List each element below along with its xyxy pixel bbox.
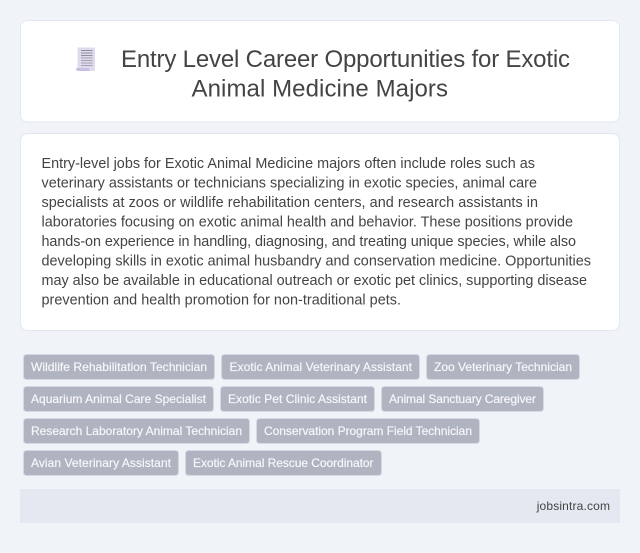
tag: Exotic Animal Veterinary Assistant [222, 354, 420, 380]
tag: Exotic Animal Veterinary Assistant: Exotic Animal Veterinary Assistant [230, 360, 413, 374]
text block: description: prevention and health promotion for non-traditional pets. [42, 292, 401, 308]
tag: Zoo Veterinary Technician [426, 354, 580, 380]
tag: Conservation Program Field Technician: Conservation Program Field Technician [264, 424, 472, 438]
tag: Exotic Pet Clinic Assistant: Exotic Pet Clinic Assistant [228, 392, 368, 406]
text block: description: specialists at zoos or wildlife rehabilitation centers, and research assistants in [42, 195, 538, 211]
tag: Aquarium Animal Care Specialist [24, 386, 214, 412]
title [121, 46, 570, 102]
tag list [24, 354, 580, 476]
tag: Conservation Program Field Technician [256, 418, 480, 444]
tag: Wildlife Rehabilitation Technician: Wildlife Rehabilitation Technician [31, 360, 207, 374]
tag: Research Laboratory Animal Technician: Research Laboratory Animal Technician [31, 424, 242, 438]
footer source text: jobsintra.com [536, 499, 610, 513]
text block: description: hands-on experience in handling, diagnosing, and treating unique species, while also [42, 234, 576, 250]
tag: Research Laboratory Animal Technician [24, 418, 250, 444]
panel: header [20, 20, 620, 122]
tag: Avian Veterinary Assistant: Avian Veterinary Assistant [31, 456, 172, 470]
title: Animal Medicine Majors [192, 76, 448, 102]
panel: description [20, 134, 620, 330]
tag: Exotic Animal Rescue Coordinator [186, 450, 382, 476]
text block: description: may also be available in educational outreach or exotic pet clinics, supporting disease [42, 273, 587, 289]
tag: Zoo Veterinary Technician: Zoo Veterinary Technician [434, 360, 572, 374]
text block: description: developing skills in exotic animal husbandry and conservation medicine. Opportunities [42, 254, 591, 270]
tag: Animal Sanctuary Caregiver: Animal Sanctuary Caregiver [389, 392, 536, 406]
tag: Wildlife Rehabilitation Technician [24, 354, 214, 380]
text block: description: veterinary assistants or technicians specializing in exotic species, animal care [42, 176, 537, 192]
tag: Aquarium Animal Care Specialist: Aquarium Animal Care Specialist [31, 392, 207, 406]
footer [20, 489, 620, 523]
tag: Exotic Pet Clinic Assistant [220, 386, 374, 412]
tag: Exotic Animal Rescue Coordinator: Exotic Animal Rescue Coordinator [193, 456, 374, 470]
text block: description [42, 156, 591, 308]
text block: description: laboratories focusing on exotic animal health and behavior. These positions provide [42, 214, 573, 230]
tag: Avian Veterinary Assistant [24, 450, 178, 476]
title: Entry Level Career Opportunities for Exotic [121, 46, 570, 73]
text block: description: Entry-level jobs for Exotic Animal Medicine majors often include roles such as [42, 156, 535, 172]
tag: Animal Sanctuary Caregiver [382, 386, 544, 412]
icon: document scroll [76, 48, 95, 71]
